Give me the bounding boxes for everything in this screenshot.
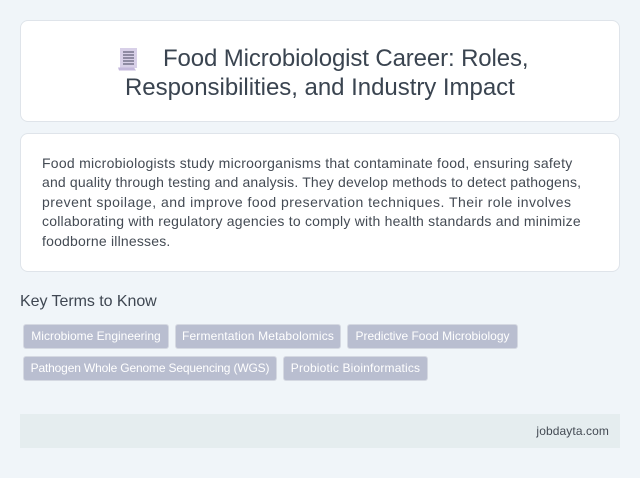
description text: and quality through testing and analysis. They develop methods to detect pathogens, — [42, 174, 581, 190]
tag: predictive food microbiology: Predictive Food Microbiology — [355, 329, 510, 343]
tag: pathogen WGS — [23, 356, 277, 381]
icon: document scroll — [118, 48, 137, 70]
footer source text: jobdayta.com — [536, 424, 609, 438]
heading: key terms: Key Terms to Know — [20, 293, 157, 310]
footer bar — [20, 414, 620, 448]
tag: fermentation metabolomics: Fermentation Metabolomics — [182, 329, 334, 343]
tag: pathogen WGS: Pathogen Whole Genome Sequencing (WGS) — [31, 361, 269, 375]
tag: probiotic bioinformatics: Probiotic Bioinformatics — [291, 361, 420, 375]
tag: fermentation metabolomics — [175, 324, 341, 349]
description text: collaborating with regulatory agencies to comply with health standards and minimize — [42, 213, 581, 229]
description text: foodborne illnesses. — [42, 233, 171, 249]
tag: microbiome engineering — [23, 324, 169, 349]
title line 2: Responsibilities, and Industry Impact — [125, 74, 515, 101]
tag: probiotic bioinformatics — [283, 356, 428, 381]
description text: Food microbiologists study microorganisms that contaminate food, ensuring safety — [42, 155, 572, 171]
description text — [42, 155, 581, 249]
panel: description card — [20, 133, 620, 272]
tag: predictive food microbiology — [347, 324, 518, 349]
tag: microbiome engineering: Microbiome Engineering — [31, 329, 161, 343]
tag list — [23, 324, 518, 381]
title line 1: Food Microbiologist Career: Roles, — [163, 45, 528, 72]
description text: prevent spoilage, and improve food preservation techniques. Their role involves — [42, 194, 572, 210]
panel: title card — [20, 20, 620, 122]
